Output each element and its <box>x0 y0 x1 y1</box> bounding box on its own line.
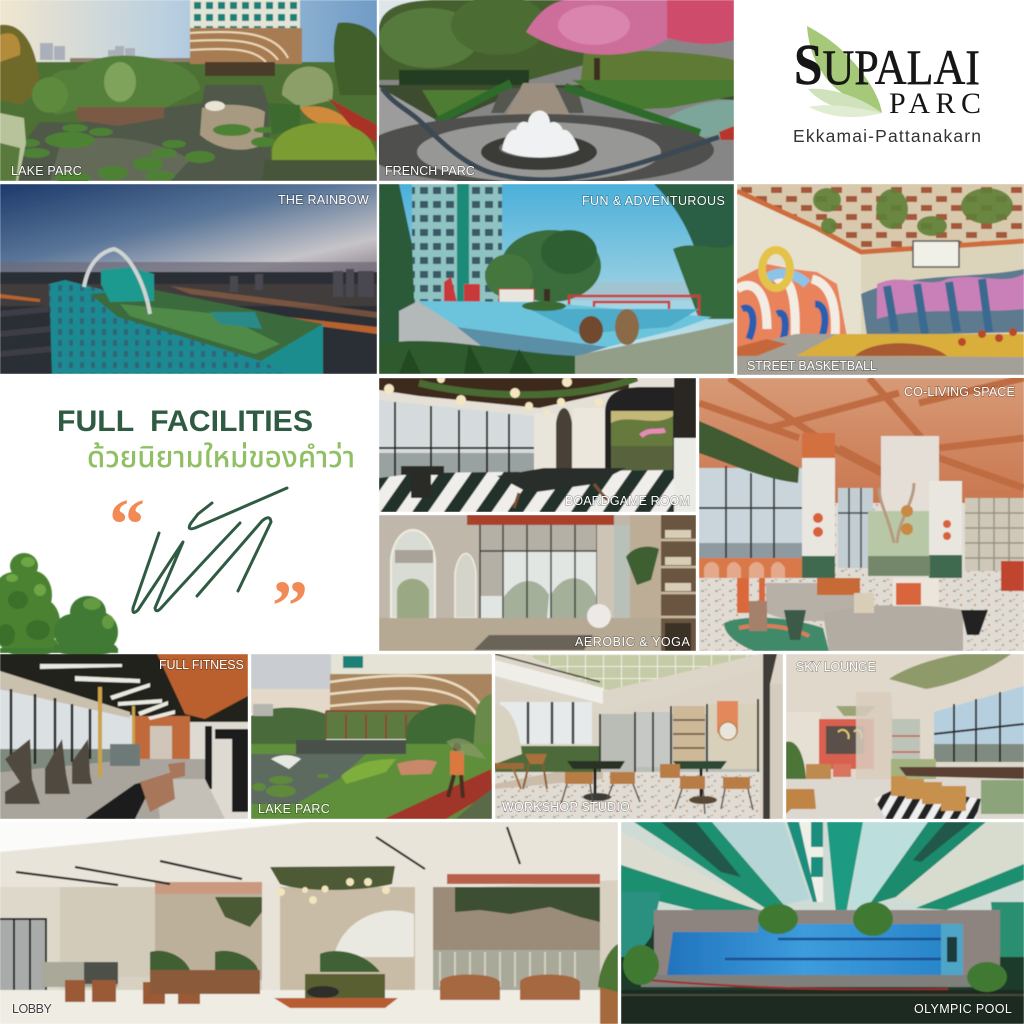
logo: Supalai Parc Ekkamai-Pattanakarn <box>793 26 981 146</box>
label: OLYMPIC POOL <box>914 1002 1012 1016</box>
panel: Full Facilities headline <box>0 405 355 657</box>
brand name: SUPALAI <box>794 32 980 97</box>
illustration: trees <box>0 553 118 657</box>
icon: leaf <box>807 26 882 117</box>
Thai subheading: ด้วยนิยามใหม่ของคำว่า <box>87 442 355 474</box>
panel: Workshop Studio photo <box>495 654 783 819</box>
panel: Fun and Adventurous photo <box>379 184 734 374</box>
label: LOBBY <box>12 1002 52 1016</box>
label: BOARDGAME ROOM <box>565 494 690 508</box>
panel: Olympic Pool photo <box>621 822 1024 1024</box>
location: Ekkamai-Pattanakarn <box>793 126 981 146</box>
panel: Lake Parc photo <box>0 0 377 181</box>
heading: FULL FACILITIES <box>57 405 313 438</box>
panel: Full Fitness photo <box>0 654 248 819</box>
label: FULL FITNESS <box>159 658 244 672</box>
panel: Lobby photo <box>0 822 618 1024</box>
panel: Lake Parc garden photo <box>251 654 492 819</box>
opening quote: “ <box>109 484 145 564</box>
label: LAKE PARC <box>258 802 330 816</box>
label: FRENCH PARC <box>385 164 475 178</box>
closing quote: ” <box>272 566 308 646</box>
label: THE RAINBOW <box>278 193 369 207</box>
panel: French Parc photo <box>379 0 734 181</box>
label: SKY LOUNGE <box>796 660 876 674</box>
panel: Street Basketball photo <box>737 184 1024 375</box>
handwritten word พัก <box>133 488 287 613</box>
panel: The Rainbow photo <box>0 184 377 374</box>
label: CO-LIVING SPACE <box>904 385 1015 399</box>
panel: Boardgame Room photo <box>379 378 696 512</box>
panel: Co-Living Space photo <box>699 378 1024 651</box>
panel: Sky Lounge photo <box>786 654 1024 819</box>
label: WORKSHOP STUDIO <box>502 800 630 814</box>
sub brand: PARC <box>889 87 981 120</box>
label: STREET BASKETBALL <box>747 359 877 373</box>
panel: Aerobic and Yoga photo <box>379 515 696 651</box>
label: LAKE PARC <box>11 164 82 178</box>
label: FUN & ADVENTUROUS <box>582 194 725 208</box>
label: AEROBIC & YOGA <box>575 635 690 649</box>
